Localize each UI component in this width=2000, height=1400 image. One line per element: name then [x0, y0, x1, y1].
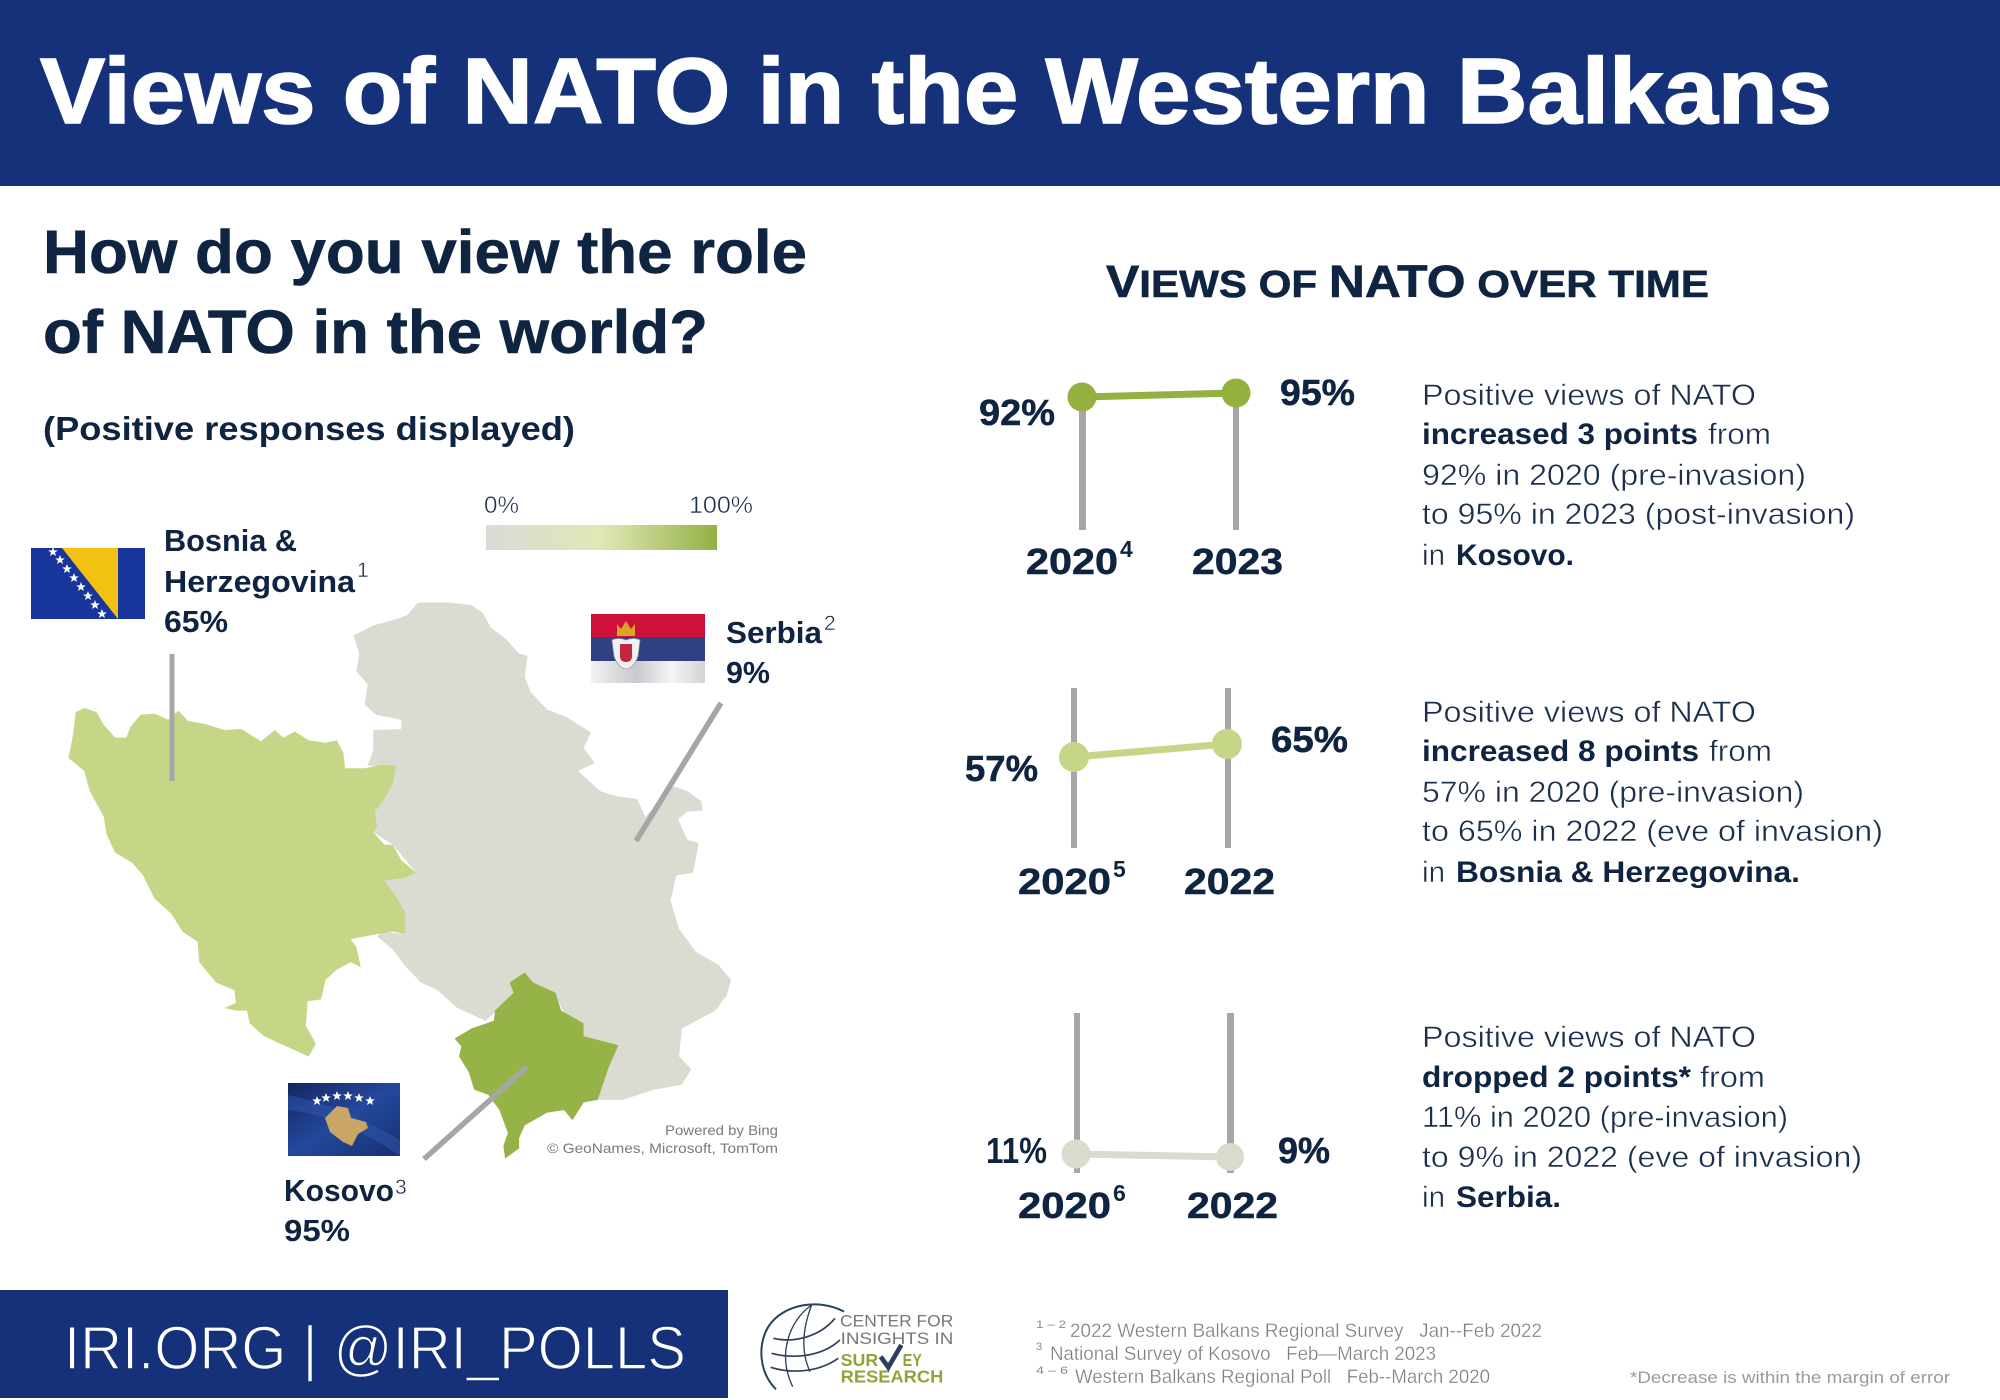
label: Serbia: 9% [726, 655, 770, 690]
slope chart: Bosnia and Herzegovina: 5 [1113, 856, 1126, 882]
text: Kosovo summary: from [1708, 418, 1771, 451]
footer banner [0, 1290, 728, 1398]
slope chart: Kosovo: 92% [979, 392, 1055, 433]
footnotes: sources: 1 – 2 [1036, 1319, 1066, 1331]
text: Serbia summary: 11% in 2020 (pre-invasion) [1422, 1101, 1788, 1134]
label: Bosnia and Herzegovina: Herzegovina [164, 564, 356, 599]
footnotes: sources: National Survey of Kosovo Feb—March 2023 [1050, 1344, 1436, 1365]
logo wordmark: INSIGHTS IN [841, 1329, 953, 1348]
slope chart: Serbia: 2022 [1187, 1185, 1278, 1226]
logo wordmark: CENTER FOR [840, 1312, 953, 1331]
slope chart: Kosovo: 2023 [1192, 541, 1283, 582]
label: Kosovo: 3 [395, 1176, 407, 1199]
footer handles: IRI.ORG | @IRI_POLLS [64, 1314, 686, 1382]
slope chart: Serbia [986, 1013, 1330, 1226]
label: Serbia: Serbia [726, 615, 823, 650]
logo wordmark: RESEARCH [841, 1367, 943, 1387]
footnotes: sources [1036, 1319, 1542, 1388]
slope chart: Bosnia and Herzegovina: 57% [965, 748, 1038, 789]
icon: flag of Serbia [591, 614, 705, 683]
slope chart: Bosnia and Herzegovina [965, 688, 1348, 902]
text: Kosovo summary: 92% in 2020 (pre-invasion) [1422, 459, 1806, 492]
footnotes: sources: 4 – 6 [1036, 1365, 1068, 1377]
icon: flag of Kosovo [288, 1083, 400, 1156]
text: Serbia summary: to 9% in 2022 (eve of invasion) [1422, 1141, 1862, 1174]
text: Bosnia and Herzegovina summary: to 65% in 2022 (eve of invasion) [1422, 815, 1883, 848]
slope chart: Serbia: 6 [1113, 1180, 1126, 1206]
label: Serbia: 2 [824, 612, 836, 635]
text: Serbia summary: in [1422, 1181, 1445, 1214]
leader line: Kosovo [424, 1067, 527, 1159]
label: Bosnia and Herzegovina: 65% [164, 604, 228, 639]
slope chart: Kosovo: 95% [1280, 372, 1355, 413]
leader line: Serbia [636, 703, 721, 841]
map credit [547, 1122, 778, 1156]
text: Kosovo summary: Kosovo. [1456, 539, 1574, 572]
text: Bosnia and Herzegovina summary: increased 8 points [1422, 735, 1699, 768]
text: Bosnia and Herzegovina summary: from [1709, 735, 1772, 768]
text: Bosnia and Herzegovina summary: in [1422, 856, 1445, 889]
text: Kosovo summary: to 95% in 2023 (post-invasion) [1422, 498, 1855, 531]
map of Bosnia, Serbia and Kosovo [68, 602, 731, 1159]
text: Bosnia and Herzegovina summary: Bosnia & Herzegovina. [1456, 856, 1800, 889]
logo globe [761, 1304, 844, 1389]
label: Kosovo [284, 1173, 407, 1248]
text: Bosnia and Herzegovina summary [1422, 696, 1883, 889]
slope chart: Serbia: 2020 [1018, 1185, 1111, 1226]
label: Kosovo: Kosovo [284, 1173, 394, 1208]
map region: Kosovo [455, 972, 618, 1159]
map region: Serbia [354, 602, 731, 1100]
icon: flag of Bosnia and Herzegovina [31, 547, 145, 619]
left heading: survey question: of NATO in the world? [43, 298, 708, 366]
left heading: survey question [43, 218, 807, 366]
slope chart: Serbia: 11% [986, 1130, 1047, 1171]
text: Serbia summary [1422, 1021, 1862, 1214]
text: Kosovo summary: Positive views of NATO [1422, 379, 1756, 412]
text: Serbia summary: from [1700, 1061, 1765, 1094]
logo wordmark: SUR [841, 1350, 878, 1370]
leader line: Bosnia [170, 654, 174, 781]
left heading: survey question: How do you view the role [43, 218, 807, 286]
slope chart: Bosnia and Herzegovina: 2022 [1184, 861, 1275, 902]
footnotes: sources: Western Balkans Regional Poll Feb--March 2020 [1075, 1367, 1490, 1388]
map credit: Powered by Bing [665, 1122, 778, 1138]
label: Kosovo: 95% [284, 1213, 350, 1248]
text: Kosovo summary: in [1422, 539, 1445, 572]
text: Serbia summary: dropped 2 points* [1422, 1061, 1691, 1094]
label: Bosnia and Herzegovina: 1 [357, 559, 369, 582]
slope chart: Kosovo: 2020 [1026, 541, 1118, 582]
legend: colour scale: 0% [484, 492, 519, 519]
label: Bosnia and Herzegovina [164, 523, 369, 639]
text: Kosovo summary [1422, 379, 1855, 572]
slope chart: Bosnia and Herzegovina: 65% [1271, 719, 1348, 760]
legend: colour scale [484, 492, 753, 550]
slope chart: Kosovo [979, 372, 1355, 582]
text: Kosovo summary: increased 3 points [1422, 418, 1698, 451]
slope chart: Bosnia and Herzegovina: 2020 [1018, 861, 1111, 902]
right heading: views over time: VIEWS OF NATO OVER TIME [1106, 256, 1709, 307]
footnote: margin of error: *Decrease is within the margin of error [1630, 1368, 1950, 1387]
logo wordmark: EY [903, 1350, 922, 1370]
label: Serbia [726, 612, 836, 690]
footnotes: sources: 2022 Western Balkans Regional Survey Jan--Feb 2022 [1070, 1321, 1542, 1342]
header banner [0, 0, 2000, 186]
text: Bosnia and Herzegovina summary: 57% in 2020 (pre-invasion) [1422, 776, 1804, 809]
title: Views of NATO in the Western Balkans [40, 39, 1832, 143]
legend: colour scale: 100% [689, 492, 753, 519]
map region: Bosnia and Herzegovina [68, 708, 416, 1057]
logo wordmark [840, 1312, 953, 1387]
text: Serbia summary: Positive views of NATO [1422, 1021, 1756, 1054]
text: Serbia summary: Serbia. [1456, 1181, 1561, 1214]
slope chart: Serbia: 9% [1278, 1130, 1330, 1171]
text: Bosnia and Herzegovina summary: Positive views of NATO [1422, 696, 1756, 729]
label: Bosnia and Herzegovina: Bosnia & [164, 523, 297, 558]
map credit: © GeoNames, Microsoft, TomTom [547, 1140, 778, 1156]
logo: Center for Insights in Survey Research [761, 1304, 953, 1389]
slope chart: Kosovo: 4 [1120, 536, 1133, 562]
subheading: positive responses: (Positive responses displayed) [43, 410, 575, 447]
footnotes: sources: 3 [1036, 1341, 1042, 1353]
